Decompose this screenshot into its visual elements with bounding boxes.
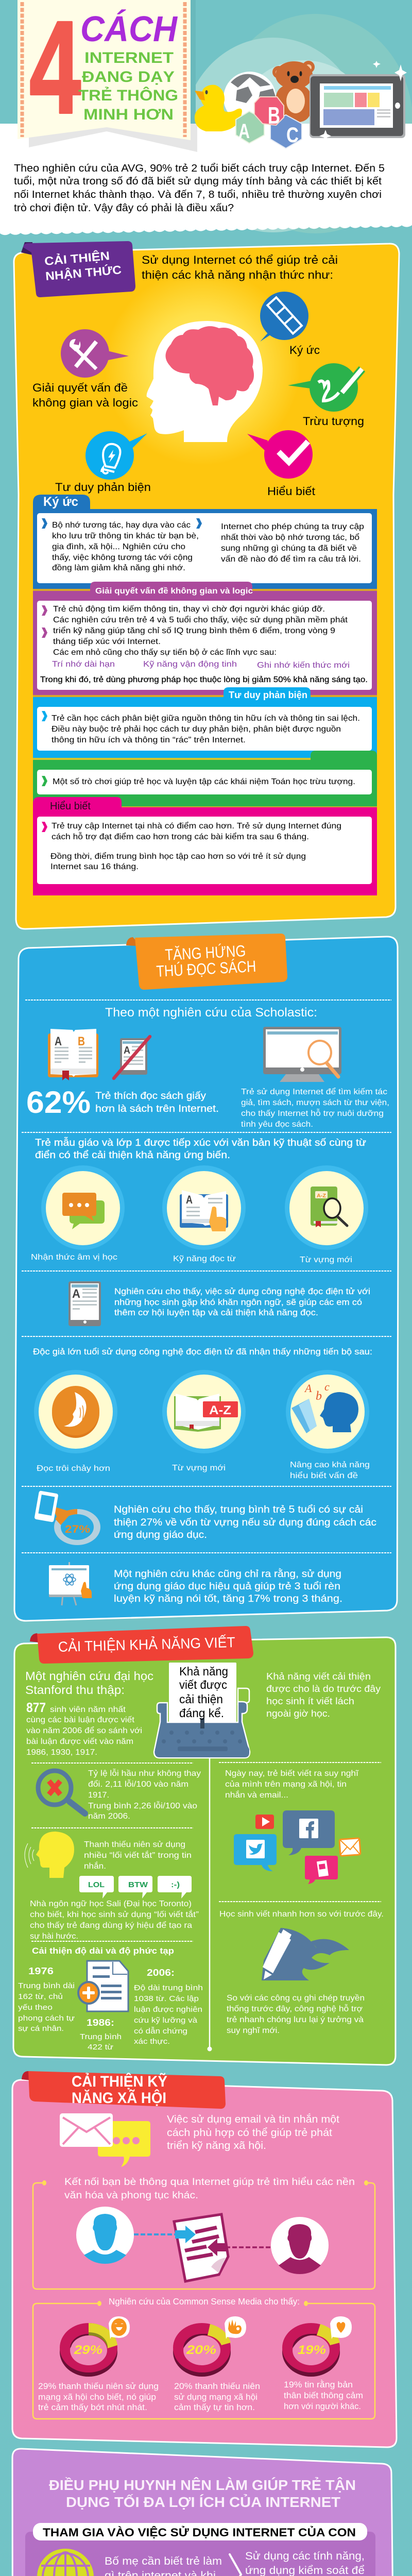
- donut: 19%: [282, 2316, 352, 2377]
- text: tỷ lệ lỗi: [88, 1768, 201, 1821]
- title banner: INTERNET: [84, 49, 174, 66]
- block: ký ức: Bộ nhớ tương tác, hay dựa vào các: [52, 521, 191, 530]
- block: tư duy phản biện: [33, 687, 377, 758]
- icon: typewriter with paper: cải thiện: [179, 1692, 223, 1706]
- text: 29%: [38, 2382, 159, 2412]
- text: 2006: luận được nghiên: [134, 2005, 202, 2014]
- block: ký ức: Internet cho phép chúng ta truy cập: [221, 522, 364, 531]
- tab heading: cải thiện kỹ năng xã hội: CẢI THIỆN KỸ: [72, 2073, 167, 2090]
- circle icon: nâng cao hiểu biết: A: [304, 1382, 312, 1395]
- block: hiểu biết: Đồng thời, điểm trung bình học tập cao hơn so với trẻ ít sử dụng: [50, 852, 306, 861]
- text: 29%: trẻ cảm thấy bớt nhút nhát.: [38, 2403, 147, 2412]
- text: ngày nay: Ngày nay, trẻ biết viết ra suy nghĩ: [225, 1769, 359, 1778]
- circle icon: kỹ năng đọc từ: [162, 1165, 246, 1263]
- text: nhà ngôn ngữ học sali: [30, 1900, 199, 1941]
- intro paragraph: trò chơi điện tử. Vậy đây có phải là điều xấu?: [14, 202, 234, 214]
- frame: kết nối bạn bè: văn hóa và phong tục khác.: [64, 2190, 198, 2201]
- circle icon: nâng cao hiểu biết: Nâng cao khả năng: [290, 1461, 370, 1469]
- text: bố mẹ cần biết: Bố mẹ cần biết trẻ làm: [105, 2555, 222, 2567]
- text: ngày nay: nhắn và email...: [225, 1790, 288, 1800]
- text: internet hỗ trợ đọc sách: giả, tìm sách, mượn sách từ thư viện,: [241, 1098, 389, 1107]
- icon: yellow head: [25, 1832, 74, 1878]
- icon: paper book: [48, 1029, 98, 1080]
- text: 1986: 422 từ: [88, 2043, 113, 2052]
- chat bubbles: LOL BTW :-): BTW: [128, 1880, 148, 1889]
- text: internet hỗ trợ đọc sách: [241, 1087, 389, 1129]
- text: 27% vốn từ: [114, 1504, 376, 1540]
- text: 20%: cảm thấy tự tin hơn.: [174, 2403, 255, 2412]
- stat: 62%: [26, 1085, 219, 1120]
- block: giải quyết vấn đề không gian và logic: Ghi nhớ kiến thức mới: [257, 661, 350, 670]
- circle icon: nâng cao hiểu biết: [286, 1370, 370, 1480]
- icon: social media bubbles: [234, 1810, 360, 1884]
- text: 1986: Trung bình: [80, 2032, 122, 2041]
- chat bubbles: LOL BTW :-): [79, 1876, 192, 1899]
- text: 2006: 2006:: [147, 1968, 175, 1978]
- text: email và tin nhắn: cách phù hợp có thể giúp trẻ phát: [167, 2127, 332, 2139]
- icon: globe with eye: [37, 2549, 107, 2576]
- icon: rubber duck: [195, 85, 242, 131]
- icon: block B: B: [268, 102, 280, 129]
- text: kỹ năng nói: Một nghiên cứu khác cũng chỉ ra rằng, sử dụng: [114, 1568, 341, 1580]
- block: giải quyết vấn đề không gian và logic: [33, 582, 377, 695]
- tab heading: cải thiện nhận thức: NHẬN THỨC: [45, 262, 122, 283]
- text: 19%: 19% tin rằng bản: [284, 2380, 353, 2389]
- heading: độ dài và độ phức tạp: Cải thiện độ dài và độ phức tạp: [32, 1946, 174, 1956]
- title banner: MINH HƠN: [83, 106, 174, 123]
- text: tỷ lệ lỗi: đổi. 2,11 lỗi/100 vào năm: [88, 1779, 188, 1789]
- block: ký ức: sung những gì chúng ta đã biết về: [221, 544, 357, 553]
- text: lối viết tắt: Thanh thiếu niên sử dụng: [84, 1840, 185, 1849]
- text: so với các công cụ: suy nghĩ mới.: [227, 2026, 280, 2035]
- circle icon: đọc trôi chảy hơn: [34, 1370, 117, 1473]
- text: 27% vốn từ: Nghiên cứu cho thấy, trung bình trẻ 5 tuổi có sự cải: [114, 1504, 363, 1515]
- text: khả năng viết cải thiện: Khả năng viết cải thiện: [266, 1671, 371, 1682]
- text: tỷ lệ lỗi: năm 2006.: [88, 1812, 130, 1821]
- intro paragraph: Theo nghiên cứu của AVG, 90% trẻ 2 tuổi biết cách truy cập Internet. Đến 5: [14, 163, 385, 174]
- icon: e-reader: [68, 1281, 101, 1326]
- text: kỹ năng nói: ứng dụng giáo dục hiệu quả giúp trẻ 3 tuổi rèn: [114, 1581, 340, 1592]
- text: lối viết tắt: nhắn.: [84, 1861, 106, 1871]
- circle icon: kỹ năng đọc từ: A: [186, 1193, 193, 1206]
- block: giải quyết vấn đề không gian và logic: Các em nhỏ cũng cho thấy sự tiến bộ ở các lĩnh vực sau:: [53, 648, 277, 657]
- text: 2006: xác thực.: [134, 2037, 170, 2046]
- bubble: trừu tượng: [288, 363, 364, 428]
- text: công nghệ đọc điện tử: thêm cơ hội luyện tập và cải thiện khả năng đọc.: [114, 1308, 318, 1317]
- text: 2006: có dẫn chứng: [134, 2027, 187, 2036]
- tab heading: cải thiện khả năng viết: CẢI THIỆN KHẢ NĂNG VIẾT: [58, 1634, 235, 1655]
- stat: 62%: hơn là sách trên Internet.: [95, 1104, 219, 1114]
- block: hiểu biết: cách hỗ trợ đạt điểm cao hơn trong các bài kiểm tra sau 6 tháng.: [52, 832, 309, 841]
- text: lối viết tắt: [84, 1840, 192, 1871]
- tab heading: tăng hứng thú đọc sách: [126, 934, 287, 990]
- tab heading: cải thiện nhận thức: [21, 241, 135, 297]
- text: khả năng viết cải thiện: được cho là do trước đây: [266, 1683, 381, 1694]
- block: giải quyết vấn đề không gian và logic: Trong khi đó, trẻ dùng phương pháp học thuộc lòng bị giảm 50% khả năng sáng tạo.: [40, 675, 368, 684]
- arrow: purple dashed: [208, 2239, 270, 2256]
- text: nghiên cứu stanford: [25, 1669, 153, 1757]
- subpanel: tham gia vào việc sử dụng internet: [25, 2523, 375, 2576]
- icon: shared document: [174, 2214, 228, 2281]
- frame: common sense media: Nghiên cứu của Common Sense Media cho thấy:: [109, 2296, 300, 2307]
- text: so với các công cụ: [227, 1994, 365, 2035]
- block: hiểu biết: Trẻ truy cập Internet tại nhà có điểm cao hơn. Trẻ sử dụng Internet đúng: [52, 821, 341, 831]
- text: 2006: Độ dài trung bình: [134, 1984, 203, 1992]
- text: nhà ngôn ngữ học sali: cho biết, khi học sinh sử dụng “lối viết tắt”: [30, 1909, 199, 1919]
- text: email và tin nhắn: Việc sử dụng email và tin nhắn một: [167, 2113, 339, 2125]
- block: hiểu biết: [33, 797, 377, 895]
- tab heading: cải thiện khả năng viết: [30, 1626, 253, 1664]
- text: 1986: 1986:: [87, 2018, 114, 2028]
- text: 1976: yếu theo: [18, 2003, 53, 2012]
- block: hiểu biết: Hiểu biết: [50, 801, 91, 812]
- text: bố mẹ cần biết: [105, 2555, 222, 2576]
- icon: paper book: B: [78, 1035, 85, 1048]
- text: internet hỗ trợ đọc sách: cho thấy Internet hỗ trợ nuôi dưỡng: [241, 1108, 384, 1118]
- text: học sinh viết nhanh hơn: Học sinh viết nhanh hơn so với trước đây.: [219, 1910, 384, 1919]
- text: sử dụng các tính năng: Sử dụng các tính năng,: [245, 2550, 365, 2562]
- icon: teddy bear: [272, 61, 315, 122]
- text: tỷ lệ lỗi: Trung bình 2,26 lỗi/100 vào: [88, 1801, 197, 1810]
- block: hiểu biết: Internet sau 16 tháng.: [50, 862, 139, 871]
- frame: kết nối bạn bè: [33, 2177, 375, 2289]
- text: email và tin nhắn: [167, 2113, 339, 2151]
- title: điều phụ huynh nên làm: ĐIỀU PHỤ HUYNH NÊN LÀM GIÚP TRẺ TẬN: [49, 2477, 356, 2493]
- arrow: chevron: [229, 2554, 241, 2576]
- donut: 19%: 19%: [298, 2343, 326, 2357]
- circle icon: nhận thức âm vị học: [31, 1165, 125, 1262]
- title: điều phụ huynh nên làm: DỤNG TỐI ĐA LỢI ÍCH CỦA INTERNET: [66, 2494, 340, 2510]
- tab heading: cải thiện kỹ năng xã hội: [22, 2071, 226, 2109]
- circle icon: từ vựng mới 2: A-Z: [209, 1403, 231, 1417]
- text: 27% vốn từ: ứng dụng giáo dục.: [114, 1529, 207, 1540]
- circle icon: từ vựng mới: [285, 1165, 368, 1264]
- text: 29%: mạng xã hội cho biết, nó giúp: [38, 2393, 156, 2402]
- chat bubbles: LOL BTW :-): LOL: [88, 1880, 105, 1889]
- icon: typewriter with paper: viết được: [179, 1678, 227, 1691]
- text: internet hỗ trợ đọc sách: Trẻ sử dụng Internet để tìm kiếm tác: [241, 1087, 387, 1096]
- white intro band with wavy bottom: [0, 124, 412, 235]
- bubble: hiểu biết: Hiểu biết: [267, 485, 315, 498]
- text: kỹ năng nói: [114, 1568, 342, 1604]
- block: tư duy phản biện: Điều này buộc trẻ phải học cách tư duy phản biện, phân biệt được nguồn: [52, 725, 341, 734]
- text: khả năng viết cải thiện: [266, 1671, 381, 1719]
- hero illustration backdrop: [183, 0, 412, 233]
- intro paragraph: tuổi, một nửa trong số đó đã biết sử dụng máy tính bảng và các thiết bị kết: [14, 176, 382, 187]
- bubble: giải quyết vấn đề: [32, 329, 138, 409]
- title banner: [18, 0, 197, 152]
- tab heading: cải thiện nhận thức: CẢI THIỆN: [44, 248, 110, 268]
- icon: monitor and magnifier: [263, 1027, 341, 1082]
- text: nhà ngôn ngữ học sali: cho thấy trẻ đang dùng ký hiệu để tạo ra: [30, 1921, 192, 1930]
- block: ký ức: nhất thời vào bộ nhớ tương tác, bổ: [221, 533, 359, 542]
- block: giải quyết vấn đề không gian và logic: tháng tiếp xúc với Internet.: [53, 637, 161, 646]
- block: tư duy phản biện: Trẻ cần học cách phân biệt giữa nguồn thông tin hữu ích và thông tin sai lệch.: [52, 714, 360, 723]
- intro paragraph: nối Internet khác thành thạo. Và đến 7, 8 tuổi, nhiều trẻ thường xuyên chơi: [14, 189, 382, 200]
- block: giải quyết vấn đề không gian và logic: Giải quyết vấn đề không gian và logic: [95, 587, 253, 596]
- text: nghiên cứu stanford: Stanford thu thập:: [25, 1683, 125, 1697]
- text: 2006: cứu kỹ lưỡng và: [134, 2016, 198, 2025]
- text: trẻ mẫu giáo: Trẻ mẫu giáo và lớp 1 được tiếp xúc với văn bản kỹ thuật số cùng từ: [35, 1137, 366, 1148]
- circle icon: từ vựng mới: Từ vựng mới: [300, 1256, 352, 1264]
- circle icon: nâng cao hiểu biết: c: [324, 1380, 330, 1393]
- icon: document with plus: [77, 1961, 128, 2011]
- text: kỹ năng nói: luyện kỹ năng nói tốt, tăng 17% trong 3 tháng.: [114, 1593, 342, 1604]
- icon: football: [224, 72, 276, 124]
- block: ký ức: [33, 495, 377, 589]
- tab heading: tăng hứng thú đọc sách: TĂNG HỨNG: [165, 942, 246, 964]
- block: ký ức: kho lưu trữ thông tin khác từ bạn bè,: [52, 532, 199, 540]
- donut: 29%: 29%: [74, 2343, 102, 2357]
- bubble: hiểu biết: [247, 430, 315, 498]
- title: điều phụ huynh nên làm: [49, 2477, 356, 2510]
- icon: block A: [236, 111, 264, 143]
- icon: crossed-out tablet: [114, 1037, 150, 1078]
- subpanel: tham gia vào việc sử dụng internet: THAM GIA VÀO VIỆC SỬ DỤNG INTERNET CỦA CON: [43, 2526, 356, 2539]
- text: 1976: sự cá nhân.: [18, 2024, 64, 2033]
- block: ký ức: Ký ức: [43, 495, 78, 509]
- text: độc giả lớn tuổi: Độc giả lớn tuổi sử dụng công nghệ đọc điện tử đã nhận thấy những tiến bộ sau:: [33, 1347, 372, 1357]
- text: so với các công cụ: trẻ nhanh chóng lưu lại ý tưởng và: [227, 2015, 364, 2024]
- text: nghiên cứu stanford: 877: [26, 1700, 46, 1715]
- text: nghiên cứu stanford: sinh viên năm nhất: [50, 1705, 126, 1714]
- text: email và tin nhắn: triển kỹ năng xã hội.: [167, 2140, 266, 2151]
- icon: e-reader: A: [72, 1287, 80, 1301]
- circle icon: nâng cao hiểu biết: hiểu biết vấn đề: [290, 1471, 358, 1480]
- block: ký ức: vấn đề nào đó để tìm ra câu trả lời.: [221, 554, 361, 564]
- text: sử dụng các tính năng: [245, 2550, 365, 2576]
- circle icon: kỹ năng đọc từ: Kỹ năng đọc từ: [173, 1255, 236, 1263]
- text: trẻ mẫu giáo: [35, 1137, 366, 1161]
- title banner: TRẺ THÔNG: [78, 87, 178, 104]
- panel: cải thiện kỹ năng xã hội: [12, 2071, 397, 2447]
- block: giải quyết vấn đề không gian và logic: Trẻ chủ động tìm kiếm thông tin, thay vì chờ đợi người khác giúp đỡ.: [53, 605, 325, 614]
- block: ký ức: đồng làm giảm khả năng ghi nhớ.: [52, 564, 185, 572]
- panel: cải thiện khả năng viết: [13, 1626, 396, 2065]
- icon: head with brain: [147, 321, 263, 442]
- bubble: ký ức: [260, 292, 320, 357]
- text: nghiên cứu stanford: vào năm 2006 để so sánh với: [26, 1726, 142, 1735]
- text: so với các công cụ: So với các công cụ ghi chép truyền: [227, 1994, 365, 2003]
- frame: kết nối bạn bè: Kết nối bạn bè thông qua Internet giúp trẻ tìm hiểu các nền: [64, 2177, 355, 2188]
- text: 1976: 162 từ, chủ: [18, 1992, 63, 2001]
- text: 1976: phong cách tự: [18, 2014, 75, 2023]
- chat bubbles: LOL BTW :-): :-): [171, 1880, 180, 1889]
- text: công nghệ đọc điện tử: những học sinh gặp khó khăn ngôn ngữ, sẽ giúp các em có: [114, 1297, 362, 1307]
- text: khả năng viết cải thiện: ngoài giờ học.: [266, 1708, 330, 1719]
- text: nhà ngôn ngữ học sali: Nhà ngôn ngữ học Sali (Đại học Toronto): [30, 1900, 192, 1908]
- tab heading: tăng hứng thú đọc sách: THÚ ĐỌC SÁCH: [156, 957, 256, 980]
- text: 19%: hơn với người khác.: [284, 2402, 361, 2411]
- donut: 20%: [173, 2316, 246, 2377]
- donut: 29%: [60, 2316, 130, 2377]
- text: 1976: Trung bình dài: [18, 1981, 75, 1990]
- tab heading: cải thiện kỹ năng xã hội: NĂNG XÃ HỘI: [72, 2089, 166, 2107]
- bubble: giải quyết vấn đề: không gian và logic: [32, 396, 138, 409]
- text: 29%: 29% thanh thiếu niên sử dụng: [38, 2382, 159, 2391]
- icon: tablet: [310, 74, 405, 138]
- text: 27% vốn từ: thiện 27% về vốn từ vựng nếu sử dụng đúng cách các: [114, 1517, 376, 1528]
- text: nghiên cứu stanford: Một nghiên cứu đại học: [25, 1669, 153, 1683]
- block: giải quyết vấn đề không gian và logic: Trí nhớ dài hạn: [52, 660, 115, 669]
- text: 1986: [80, 2018, 122, 2052]
- circle icon: từ vựng mới 2: [162, 1370, 246, 1472]
- text: 2006: [134, 1968, 203, 2046]
- text: 19%: thân biết thông cảm: [284, 2391, 363, 2400]
- text: nghiên cứu stanford: bài luận được viết vào năm: [26, 1737, 133, 1746]
- icon: phone with 27% donut: [34, 1490, 100, 1545]
- icon: toys and tablet: [195, 61, 407, 148]
- text: 1976: 1976: [28, 1966, 54, 1976]
- text: tỷ lệ lỗi: 1917.: [88, 1791, 109, 1800]
- icon: envelope and chat: [60, 2113, 150, 2167]
- bubble: giải quyết vấn đề: Giải quyết vấn đề: [32, 381, 128, 394]
- icon: typewriter with paper: Khả năng: [179, 1665, 228, 1678]
- block: giải quyết vấn đề không gian và logic: triển kỹ năng giúp tăng chỉ số IQ trung bình thêm 6 điểm, trong vòng 9: [53, 626, 335, 635]
- icon: typewriter with paper: đáng kể.: [179, 1706, 224, 1720]
- text: 20%: [174, 2382, 260, 2412]
- panel: tăng hứng thú đọc sách: [14, 934, 398, 1621]
- icon: block C: C: [286, 123, 299, 147]
- circle icon: từ vựng mới: A-Z: [317, 1193, 326, 1199]
- icon: pencil with flame: [262, 1928, 349, 1980]
- block: trừu tượng: [33, 751, 377, 807]
- block: trừu tượng: Một số trò chơi giúp trẻ học và luyện tập các khái niệm Toán học trừu tượng.: [53, 777, 355, 786]
- text: nghiên cứu stanford: cùng các bài luận được viết: [26, 1716, 135, 1724]
- text: 20%: sử dụng mạng xã hội: [174, 2393, 258, 2402]
- block: tư duy phản biện: thông tin hữu ích và thông tin “rác” trên Internet.: [52, 736, 246, 744]
- intro paragraph: [14, 163, 385, 214]
- text: trẻ mẫu giáo: điển có thể cải thiện khả năng ứng biến.: [35, 1150, 230, 1161]
- text: so với các công cụ: thống trước đây, công nghệ hỗ trợ: [227, 2004, 363, 2013]
- icon: typewriter with paper: [154, 1663, 250, 1758]
- text: khả năng viết cải thiện: học sinh ít viết lách: [266, 1696, 354, 1706]
- title banner: ĐANG DẠY: [82, 69, 175, 86]
- text: 19%: [284, 2380, 363, 2411]
- donut: 20%: 20%: [186, 2343, 216, 2357]
- panel: phụ huynh nên làm: [12, 2449, 397, 2576]
- circle icon: đọc trôi chảy hơn: Đọc trôi chảy hơn: [37, 1464, 110, 1473]
- circle icon: nâng cao hiểu biết: b: [316, 1389, 322, 1403]
- intro text: thiện các khả năng nhận thức như:: [142, 268, 333, 281]
- bubble: trừu tượng: Trừu tượng: [303, 415, 364, 428]
- icon: phone with 27% donut: 27%: [65, 1523, 90, 1535]
- block: giải quyết vấn đề không gian và logic: Các nghiên cứu trên trẻ 4 và 5 tuổi cho thấy, việc sử dụng phần mềm phát: [53, 615, 348, 624]
- block: ký ức: gia đình, xã hội... Nghiên cứu cho: [52, 543, 185, 551]
- circle icon: từ vựng mới 2: Từ vựng mới: [172, 1464, 226, 1472]
- intro text: [142, 253, 338, 281]
- circle icon: nhận thức âm vị học: Nhận thức âm vị học: [31, 1253, 117, 1262]
- bubble: ký ức: Ký ức: [289, 344, 320, 357]
- text: ngày nay: của mình trên mạng xã hội, tin: [225, 1780, 347, 1789]
- text: nghiên cứu stanford: 1986, 1930, 1917.: [26, 1748, 97, 1757]
- text: 1976: [18, 1966, 75, 2033]
- block: giải quyết vấn đề không gian và logic: Kỹ năng vận động tinh: [143, 660, 237, 669]
- icon: block A: A: [238, 120, 250, 143]
- icon: magnifier with error mark: [38, 1771, 85, 1814]
- panel: cải thiện nhận thức: [14, 241, 399, 929]
- icon: paper book: A: [55, 1035, 62, 1048]
- text: nhà ngôn ngữ học sali: sự hài hước.: [30, 1932, 78, 1941]
- icon: block C: [270, 115, 302, 148]
- icon: easel with atom: [49, 1562, 92, 1605]
- block: tư duy phản biện: Tư duy phản biện: [229, 690, 307, 700]
- text: ngày nay: [225, 1769, 359, 1800]
- heading: scholastic: Theo một nghiên cứu của Scholastic:: [105, 1006, 317, 1020]
- icon: block B: [254, 97, 284, 129]
- icon: purple person: [271, 2217, 329, 2274]
- bubble: tư duy phản biện: Tư duy phản biện: [55, 481, 151, 494]
- intro text: Sử dụng Internet có thể giúp trẻ cải: [142, 253, 338, 266]
- frame: common sense media: [33, 2296, 375, 2419]
- text: internet hỗ trợ đọc sách: tình yêu đọc sách.: [241, 1120, 313, 1129]
- icon: crossed-out tablet: A: [124, 1045, 130, 1056]
- stat: 62%: 62%: [26, 1085, 91, 1120]
- text: công nghệ đọc điện tử: [114, 1286, 370, 1317]
- text: lối viết tắt: nhiều “lối viết tắt” trong tin: [84, 1850, 192, 1860]
- text: tỷ lệ lỗi: Tỷ lệ lỗi hầu như không thay: [88, 1768, 201, 1778]
- bubble: tư duy phản biện: [55, 431, 151, 494]
- icon: blue person: [76, 2207, 134, 2264]
- arrow: blue dashed: [134, 2226, 196, 2243]
- text: công nghệ đọc điện tử: Nghiên cứu cho thấy, việc sử dụng công nghệ đọc điện tử với: [114, 1286, 370, 1296]
- text: 20%: 20% thanh thiếu niên: [174, 2382, 260, 2391]
- title banner: CÁCH: [80, 9, 178, 49]
- stat: 62%: Trẻ thích đọc sách giấy: [95, 1091, 207, 1101]
- block: ký ức: thấy, việc không tương tác với cộng: [52, 553, 193, 562]
- icon: sparkles: [319, 61, 407, 143]
- text: 2006: 1038 từ. Các lập: [134, 1994, 199, 2003]
